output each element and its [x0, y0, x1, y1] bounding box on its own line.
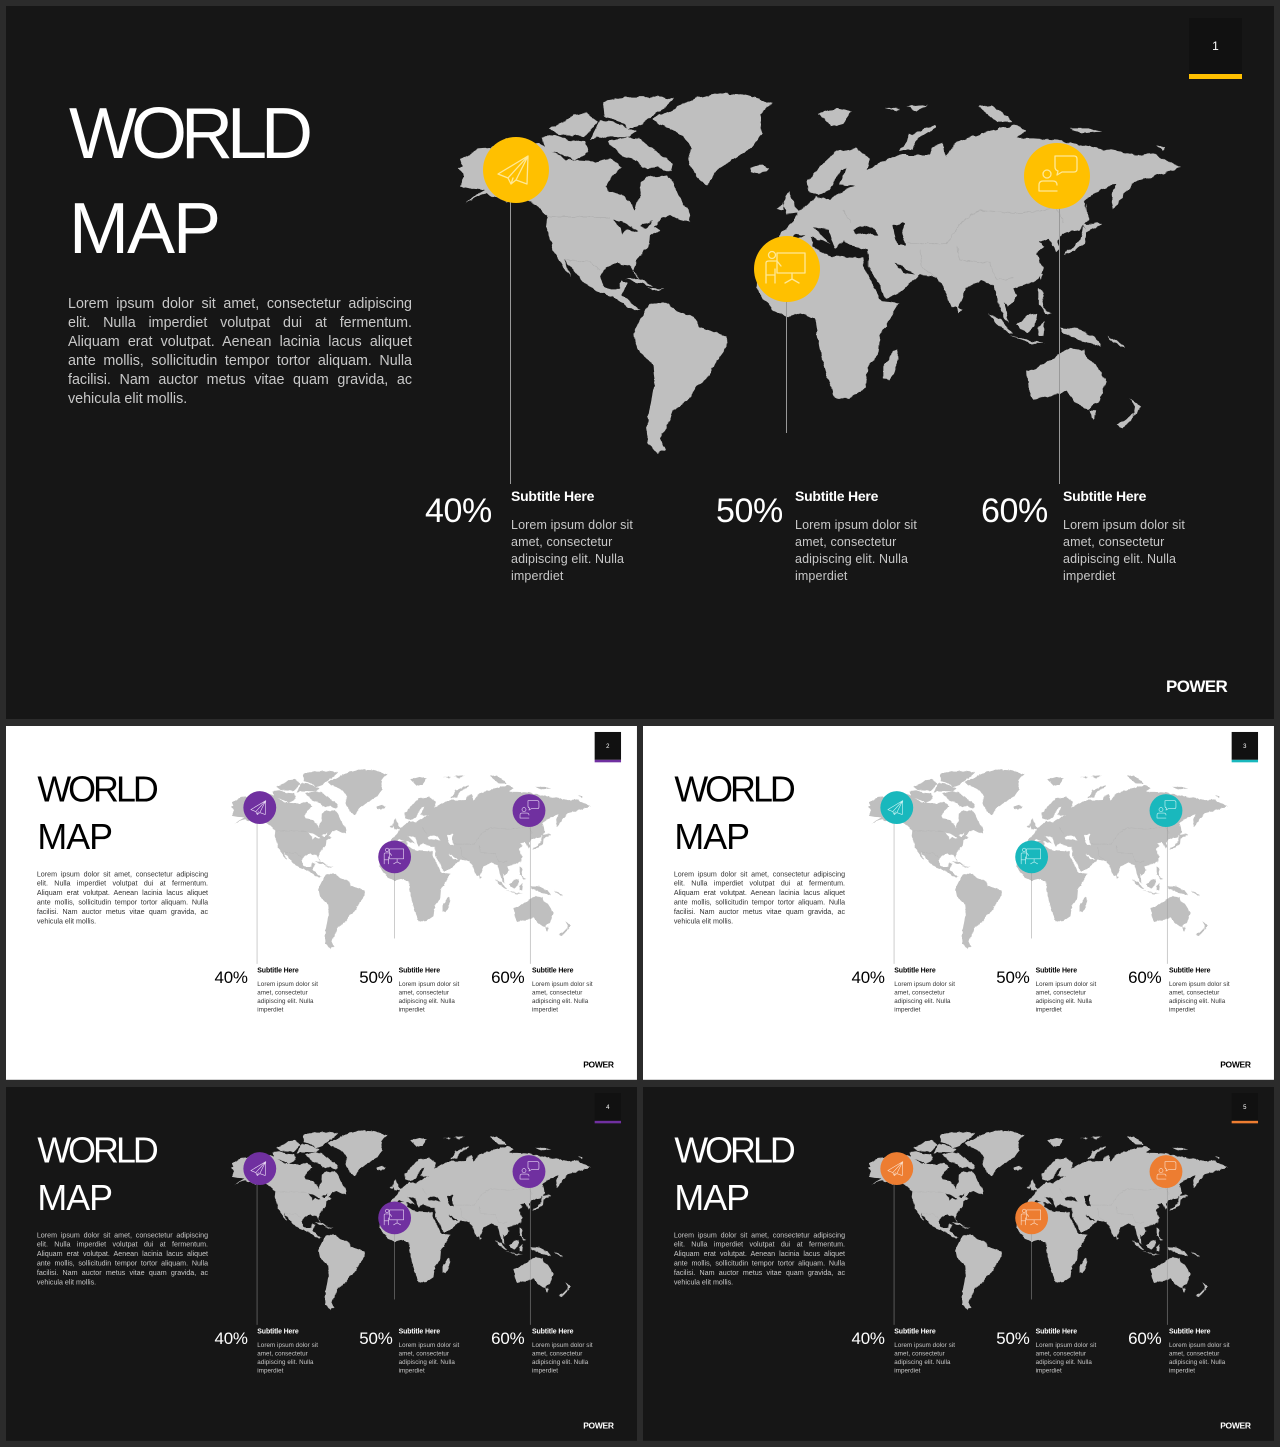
description text: facilisi. Nam auctor metus vitae quam gravida, ac — [37, 1269, 208, 1277]
leader line 1 — [893, 823, 895, 964]
body text 3: adipiscing elit. Nulla — [532, 998, 588, 1005]
subtitle 2: Subtitle Here — [1036, 966, 1077, 974]
body text 3: imperdiet — [1169, 1367, 1195, 1374]
body text 2: amet, consectetur — [1036, 989, 1086, 996]
body text 1 — [894, 1342, 955, 1374]
body text 1: Lorem ipsum dolor sit — [257, 1342, 318, 1349]
icon: chat pin — [513, 794, 545, 827]
body text 1: imperdiet — [257, 1367, 283, 1374]
body text 1: adipiscing elit. Nulla — [894, 1359, 951, 1366]
body text 2: Lorem ipsum dolor sit — [399, 981, 459, 988]
body text 1: amet, consectetur — [894, 989, 945, 996]
body text 3 — [1169, 1342, 1230, 1374]
description text: elit. Nulla imperdiet volutpat dui at fermentum. — [37, 880, 208, 888]
body text 3: amet, consectetur — [532, 1350, 582, 1357]
body text 3: imperdiet — [532, 1006, 558, 1013]
body text 3: Lorem ipsum dolor sit — [1169, 981, 1230, 988]
description text — [36, 870, 208, 926]
body text 1: Lorem ipsum dolor sit — [894, 1342, 955, 1349]
title line: MAP: MAP — [37, 1178, 112, 1218]
world map — [868, 1130, 1228, 1310]
body text 1: Lorem ipsum dolor sit — [257, 981, 318, 988]
stat 50%: 50% — [996, 1329, 1030, 1348]
icon: chat pin — [1024, 143, 1090, 209]
description text: Aliquam erat volutpat. Aenean lacinia lacus aliquet — [674, 1250, 845, 1258]
leader line 3 — [1166, 823, 1168, 964]
description text: elit. Nulla imperdiet volutpat dui at fermentum. — [674, 880, 845, 888]
description text: facilisi. Nam auctor metus vitae quam gravida, ac — [674, 1269, 845, 1277]
body text 3: adipiscing elit. Nulla — [1169, 998, 1225, 1005]
stat 60%: 60% — [1128, 968, 1161, 987]
leader line 2 — [393, 1231, 396, 1299]
body text 2 — [1036, 1342, 1096, 1374]
body text 3: adipiscing elit. Nulla — [1169, 1359, 1225, 1366]
slide number box: 1 — [1212, 39, 1219, 53]
description text: elit. Nulla imperdiet volutpat dui at fermentum. — [68, 315, 412, 331]
accent bar — [595, 760, 621, 762]
brand: POWER — [1220, 1060, 1251, 1069]
body text 2: amet, consectetur — [399, 1350, 449, 1357]
description text: Aliquam erat volutpat. Aenean lacinia lacus aliquet — [37, 889, 208, 897]
body text 1: amet, consectetur — [257, 1350, 308, 1357]
description text: ante mollis, sollicitudin tempor tortor aliquam. Nulla — [674, 899, 845, 907]
body text 3: imperdiet — [1169, 1006, 1195, 1013]
stat 40%: 40% — [214, 968, 248, 987]
body text 2: imperdiet — [399, 1006, 425, 1013]
title line: MAP: MAP — [69, 189, 219, 269]
accent bar — [1232, 1121, 1258, 1123]
body text 2: amet, consectetur — [795, 535, 896, 549]
leader line 3 — [529, 823, 531, 964]
subtitle 2: Subtitle Here — [399, 1327, 440, 1335]
stat 50%: 50% — [716, 492, 783, 530]
description text: vehicula elit mollis. — [37, 1279, 96, 1287]
description text: Lorem ipsum dolor sit amet, consectetur adipiscing — [674, 870, 845, 878]
slide number box: 3 — [1243, 742, 1247, 749]
icon: presenter pin — [1015, 1201, 1048, 1234]
body text 2: imperdiet — [795, 569, 848, 583]
body text 3: adipiscing elit. Nulla — [532, 1359, 588, 1366]
description text: Lorem ipsum dolor sit amet, consectetur adipiscing — [68, 296, 412, 312]
body text 3 — [1063, 518, 1185, 583]
title line: WORLD: WORLD — [69, 94, 307, 174]
body text 1: adipiscing elit. Nulla — [257, 998, 314, 1005]
slide number box: 5 — [1243, 1103, 1247, 1110]
leader line 2 — [1030, 1231, 1033, 1299]
body text 3: Lorem ipsum dolor sit — [532, 1342, 593, 1349]
description text — [674, 870, 846, 926]
body text 1: imperdiet — [894, 1006, 920, 1013]
leader line 1 — [256, 823, 258, 964]
world map — [868, 769, 1228, 949]
subtitle 2: Subtitle Here — [1036, 1327, 1077, 1335]
description text: facilisi. Nam auctor metus vitae quam gravida, ac — [68, 372, 412, 388]
description text: vehicula elit mollis. — [37, 918, 96, 926]
body text 2: imperdiet — [1036, 1006, 1062, 1013]
slide number box: 4 — [606, 1103, 610, 1110]
panel: slide 2 white purple — [6, 726, 637, 1080]
subtitle 1: Subtitle Here — [894, 1327, 936, 1335]
body text 3: imperdiet — [1063, 569, 1116, 583]
stat 40%: 40% — [851, 968, 885, 987]
body text 2: amet, consectetur — [399, 989, 449, 996]
description text — [36, 1231, 208, 1287]
description text: Lorem ipsum dolor sit amet, consectetur adipiscing — [674, 1231, 845, 1239]
body text 2: Lorem ipsum dolor sit — [795, 518, 917, 532]
leader line 3 — [529, 1184, 531, 1325]
body text 2: Lorem ipsum dolor sit — [1036, 981, 1096, 988]
body text 1: Lorem ipsum dolor sit — [511, 518, 633, 532]
title line: MAP: MAP — [674, 817, 749, 857]
body text 1: amet, consectetur — [894, 1350, 945, 1357]
description text: elit. Nulla imperdiet volutpat dui at fermentum. — [674, 1241, 845, 1249]
body text 1: imperdiet — [511, 569, 564, 583]
leader line 1 — [510, 201, 511, 484]
description text: Lorem ipsum dolor sit amet, consectetur adipiscing — [37, 870, 208, 878]
slide number box — [1232, 1093, 1258, 1121]
body text 2: imperdiet — [399, 1367, 425, 1374]
slide number box — [1232, 732, 1258, 760]
subtitle 3: Subtitle Here — [1169, 1327, 1210, 1335]
body text 3: amet, consectetur — [1169, 989, 1219, 996]
title line: WORLD: WORLD — [674, 1131, 793, 1171]
subtitle 3: Subtitle Here — [1063, 488, 1146, 504]
body text 1: Lorem ipsum dolor sit — [894, 981, 955, 988]
body text 2: amet, consectetur — [1036, 1350, 1086, 1357]
icon: paper plane pin — [483, 137, 549, 203]
subtitle 2: Subtitle Here — [399, 966, 440, 974]
icon: presenter pin — [378, 840, 411, 873]
body text 3 — [532, 981, 593, 1013]
description text: ante mollis, sollicitudin tempor tortor aliquam. Nulla — [37, 1260, 208, 1268]
slide number box — [595, 1093, 621, 1121]
leader line 2 — [393, 870, 396, 938]
stat 40%: 40% — [425, 492, 492, 530]
subtitle 3: Subtitle Here — [1169, 966, 1210, 974]
stat 60%: 60% — [1128, 1329, 1161, 1348]
description text: ante mollis, sollicitudin tempor tortor aliquam. Nulla — [37, 899, 208, 907]
slide number box — [595, 732, 621, 760]
description text: vehicula elit mollis. — [68, 391, 187, 407]
body text 1 — [511, 518, 633, 583]
body text 2 — [1036, 981, 1096, 1013]
subtitle 1: Subtitle Here — [511, 488, 594, 504]
icon: presenter pin — [1015, 840, 1048, 873]
description text: ante mollis, sollicitudin tempor tortor aliquam. Nulla — [68, 353, 412, 369]
body text 1 — [257, 1342, 318, 1374]
body text 3 — [532, 1342, 593, 1374]
stat 60%: 60% — [491, 968, 524, 987]
title line: WORLD: WORLD — [37, 1131, 156, 1171]
brand: POWER — [1220, 1421, 1251, 1430]
stat 50%: 50% — [359, 968, 393, 987]
description text: Lorem ipsum dolor sit amet, consectetur adipiscing — [37, 1231, 208, 1239]
leader line 1 — [256, 1184, 258, 1325]
stat 50%: 50% — [359, 1329, 393, 1348]
panel: slide 4 dark purple — [6, 1087, 637, 1441]
stat 40%: 40% — [851, 1329, 885, 1348]
subtitle 2: Subtitle Here — [795, 488, 878, 504]
body text 2 — [795, 518, 917, 583]
leader line 2 — [1030, 870, 1033, 938]
panel: slide 5 dark orange — [643, 1087, 1274, 1441]
description text: Aliquam erat volutpat. Aenean lacinia lacus aliquet — [68, 334, 412, 350]
world map — [458, 92, 1180, 454]
body text 3: amet, consectetur — [1169, 1350, 1219, 1357]
body text 3: Lorem ipsum dolor sit — [532, 981, 593, 988]
leader line 3 — [1059, 201, 1060, 484]
body text 2: adipiscing elit. Nulla — [1036, 998, 1092, 1005]
subtitle 3: Subtitle Here — [532, 1327, 573, 1335]
accent bar — [595, 1121, 621, 1123]
body text 2: adipiscing elit. Nulla — [795, 552, 908, 566]
body text 2: adipiscing elit. Nulla — [399, 1359, 455, 1366]
body text 1: amet, consectetur — [257, 989, 308, 996]
body text 1 — [257, 981, 318, 1013]
description text: vehicula elit mollis. — [674, 918, 733, 926]
body text 1 — [894, 981, 955, 1013]
icon: paper plane pin — [243, 791, 276, 824]
panel: slide 3 white teal — [643, 726, 1274, 1080]
body text 2 — [398, 1342, 460, 1374]
stat 50%: 50% — [996, 968, 1030, 987]
body text 1: adipiscing elit. Nulla — [257, 1359, 314, 1366]
brand: POWER — [1166, 677, 1227, 696]
world map — [231, 769, 590, 949]
icon: presenter pin — [378, 1201, 411, 1234]
slide number box — [1189, 18, 1242, 74]
icon: chat pin — [513, 1155, 545, 1188]
body text 1: amet, consectetur — [511, 535, 612, 549]
body text 2: adipiscing elit. Nulla — [399, 998, 455, 1005]
body text 1: imperdiet — [894, 1367, 920, 1374]
body text 3: imperdiet — [532, 1367, 558, 1374]
leader line 1 — [893, 1184, 895, 1325]
description text: elit. Nulla imperdiet volutpat dui at fermentum. — [37, 1241, 208, 1249]
title line: WORLD: WORLD — [674, 770, 793, 810]
leader line 2 — [786, 296, 787, 433]
accent bar — [1232, 760, 1258, 762]
stat 60%: 60% — [981, 492, 1048, 530]
world map — [231, 1130, 590, 1310]
title line: WORLD: WORLD — [37, 770, 156, 810]
accent bar — [1189, 74, 1242, 79]
icon: chat pin — [1150, 1155, 1182, 1188]
body text 3: amet, consectetur — [532, 989, 582, 996]
panel: main slide yellow dark — [6, 6, 1274, 719]
icon: paper plane pin — [880, 791, 913, 824]
description text: ante mollis, sollicitudin tempor tortor aliquam. Nulla — [674, 1260, 845, 1268]
brand: POWER — [583, 1421, 614, 1430]
icon: paper plane pin — [880, 1152, 913, 1185]
subtitle 1: Subtitle Here — [894, 966, 936, 974]
stat 60%: 60% — [491, 1329, 524, 1348]
body text 3 — [1169, 981, 1230, 1013]
body text 3: amet, consectetur — [1063, 535, 1164, 549]
description text: Aliquam erat volutpat. Aenean lacinia lacus aliquet — [674, 889, 845, 897]
title line: MAP: MAP — [674, 1178, 749, 1218]
icon: paper plane pin — [243, 1152, 276, 1185]
body text 2: adipiscing elit. Nulla — [1036, 1359, 1092, 1366]
icon: presenter pin — [754, 236, 820, 302]
body text 2: Lorem ipsum dolor sit — [399, 1342, 459, 1349]
subtitle 1: Subtitle Here — [257, 966, 299, 974]
body text 2 — [398, 981, 460, 1013]
body text 3: Lorem ipsum dolor sit — [1169, 1342, 1230, 1349]
brand: POWER — [583, 1060, 614, 1069]
body text 1: imperdiet — [257, 1006, 283, 1013]
subtitle 1: Subtitle Here — [257, 1327, 299, 1335]
body text 3: adipiscing elit. Nulla — [1063, 552, 1176, 566]
leader line 3 — [1166, 1184, 1168, 1325]
description text: facilisi. Nam auctor metus vitae quam gravida, ac — [674, 908, 845, 916]
body text 3: Lorem ipsum dolor sit — [1063, 518, 1185, 532]
stat 40%: 40% — [214, 1329, 248, 1348]
body text 1: adipiscing elit. Nulla — [894, 998, 951, 1005]
description text — [674, 1231, 846, 1287]
icon: chat pin — [1150, 794, 1182, 827]
slide number box: 2 — [606, 742, 610, 749]
body text 2: Lorem ipsum dolor sit — [1036, 1342, 1096, 1349]
title line: MAP: MAP — [37, 817, 112, 857]
body text 1: adipiscing elit. Nulla — [511, 552, 624, 566]
description text: facilisi. Nam auctor metus vitae quam gravida, ac — [37, 908, 208, 916]
body text 2: imperdiet — [1036, 1367, 1062, 1374]
description text — [68, 296, 412, 407]
description text: vehicula elit mollis. — [674, 1279, 733, 1287]
subtitle 3: Subtitle Here — [532, 966, 573, 974]
description text: Aliquam erat volutpat. Aenean lacinia lacus aliquet — [37, 1250, 208, 1258]
